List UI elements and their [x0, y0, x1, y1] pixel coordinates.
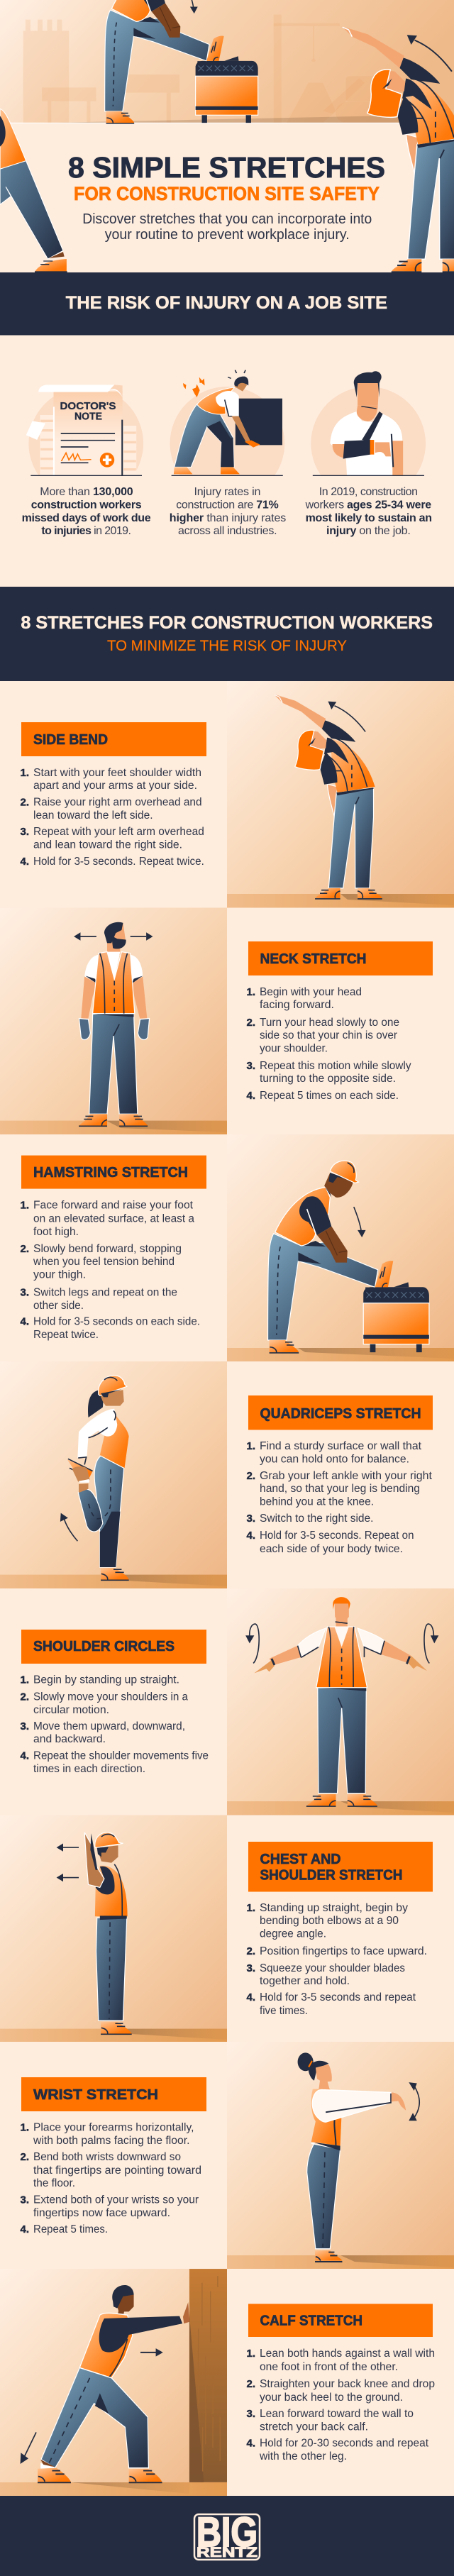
steps: wrist stretch: with both palms facing the floor. — [33, 2135, 190, 2147]
steps: calf stretch: 3. — [246, 2408, 255, 2420]
steps: quadriceps stretch: Find a sturdy surface or wall that — [260, 1440, 422, 1452]
illustration: calf stretch figure pushing a wall — [21, 2269, 227, 2482]
steps: shoulder circles: Repeat the shoulder movements five — [33, 1750, 209, 1762]
steps: wrist stretch: Repeat 5 times. — [33, 2223, 108, 2235]
steps: side bend: 3. — [20, 826, 29, 838]
steps: shoulder circles: 2. — [20, 1691, 29, 1703]
steps: calf stretch: 4. — [246, 2438, 255, 2450]
steps: shoulder circles — [20, 1674, 209, 1775]
panel: neck stretch — [0, 908, 433, 1134]
stat: injury rate: Injury rates in — [194, 486, 260, 498]
stat: injury rate — [170, 486, 286, 537]
steps: shoulder circles: Slowly move your shoulders in a — [33, 1691, 188, 1703]
icon: doctor's note: NOTE — [74, 411, 102, 423]
steps: chest and shoulder stretch: bending both elbows at a 90 — [260, 1915, 399, 1927]
steps: calf stretch — [246, 2348, 435, 2462]
label: side bend — [21, 722, 206, 756]
steps: chest and shoulder stretch: 3. — [246, 1962, 255, 1974]
steps: quadriceps stretch: 4. — [246, 1530, 255, 1542]
steps: chest and shoulder stretch: 1. — [246, 1902, 255, 1914]
label: quadriceps stretch — [248, 1395, 433, 1430]
illustration panel background and floor — [0, 2269, 227, 2496]
steps: chest and shoulder stretch: Hold for 3-5 seconds and repeat — [260, 1991, 416, 2003]
label: chest and shoulder stretch: SHOULDER STRETCH — [260, 1867, 403, 1883]
section banner: risk of injury — [0, 272, 454, 335]
panel: hero header — [0, 0, 454, 272]
section banner: risk of injury: THE RISK OF INJURY ON A JOB SITE — [66, 293, 387, 313]
logo: BigRentz: BIG — [196, 2509, 258, 2555]
steps: calf stretch: Lean both hands against a wall with — [260, 2348, 435, 2360]
steps: neck stretch: your shoulder. — [260, 1043, 328, 1054]
intro text — [82, 211, 372, 243]
steps: shoulder circles: 4. — [20, 1750, 29, 1762]
steps: hamstring stretch: 2. — [20, 1243, 29, 1255]
label: neck stretch — [248, 941, 433, 975]
title: 8 SIMPLE STRETCHES — [68, 151, 385, 184]
steps: shoulder circles: Begin by standing up straight. — [33, 1674, 179, 1686]
illustration panel background and floor — [0, 1361, 227, 1588]
label: chest and shoulder stretch: CHEST AND — [260, 1851, 340, 1867]
steps: chest and shoulder stretch: 2. — [246, 1945, 255, 1957]
steps: wrist stretch: Extend both of your wrists so your — [33, 2194, 199, 2206]
stat: age group: In 2019, construction — [319, 486, 418, 498]
steps: quadriceps stretch: behind you at the knee. — [260, 1496, 374, 1508]
steps: neck stretch: turning to the opposite side. — [260, 1073, 396, 1085]
steps: wrist stretch: the floor. — [33, 2177, 75, 2189]
panel: chest and shoulder stretch — [0, 1815, 433, 2042]
steps: shoulder circles: and backward. — [33, 1733, 106, 1745]
section banner: 8 stretches — [0, 587, 454, 681]
stat: age group — [305, 486, 432, 537]
steps: hamstring stretch: other side. — [33, 1300, 84, 1312]
steps: hamstring stretch: Slowly bend forward, stopping — [33, 1243, 182, 1255]
steps: quadriceps stretch — [246, 1440, 433, 1555]
logo: BigRentz: RENTZ — [196, 2545, 258, 2560]
label: neck stretch: NECK STRETCH — [260, 951, 366, 967]
steps: side bend — [20, 767, 204, 868]
intro text: your routine to prevent workplace injury. — [105, 227, 350, 243]
icon: doctor's note — [26, 385, 143, 476]
illustration: neck stretch figure — [74, 922, 153, 1126]
steps: neck stretch: 3. — [246, 1060, 255, 1072]
steps: wrist stretch — [20, 2122, 201, 2235]
steps: side bend: 4. — [20, 856, 29, 868]
steps: side bend: Start with your feet shoulder width — [33, 767, 201, 779]
steps: side bend: and lean toward the right side. — [33, 839, 182, 851]
steps: hamstring stretch: Repeat twice. — [33, 1329, 99, 1341]
stat: injury rate: across all industries. — [178, 525, 277, 537]
steps: shoulder circles: Move them upward, downward, — [33, 1720, 185, 1732]
panel: side bend — [20, 681, 454, 908]
steps: calf stretch: Straighten your back knee and drop — [260, 2378, 435, 2390]
steps: quadriceps stretch: hand, so that your leg is bending — [260, 1483, 420, 1495]
section banner: 8 stretches: TO MINIMIZE THE RISK OF INJURY — [107, 638, 347, 654]
steps: quadriceps stretch: Switch to the right side. — [260, 1513, 373, 1525]
label: quadriceps stretch: QUADRICEPS STRETCH — [260, 1405, 421, 1422]
steps: hamstring stretch: your thigh. — [33, 1269, 86, 1281]
steps: hamstring stretch: on an elevated surface, at least a — [33, 1212, 194, 1225]
panel: wrist stretch — [20, 2042, 454, 2269]
icon: worker lifting a heavy box with back pain — [170, 370, 285, 476]
panel: calf stretch — [0, 2269, 435, 2496]
steps: chest and shoulder stretch: Standing up straight, begin by — [260, 1902, 408, 1914]
steps: calf stretch: stretch your back calf. — [260, 2421, 368, 2433]
steps: calf stretch: with the other leg. — [259, 2450, 347, 2462]
steps: chest and shoulder stretch: together and hold. — [260, 1975, 350, 1987]
steps: wrist stretch: 1. — [20, 2122, 29, 2134]
steps: wrist stretch: Place your forearms horizontally, — [33, 2122, 194, 2134]
stat: age group: most likely to sustain an — [306, 512, 432, 524]
steps: hamstring stretch: 1. — [20, 1200, 29, 1212]
section banner: 8 stretches: 8 STRETCHES FOR CONSTRUCTION WORKERS — [21, 613, 433, 633]
steps: side bend: Hold for 3-5 seconds. Repeat twice. — [33, 856, 204, 868]
steps: neck stretch: Turn your head slowly to one — [260, 1017, 399, 1029]
steps: shoulder circles: 3. — [20, 1720, 29, 1732]
steps: neck stretch: facing forward. — [260, 999, 334, 1011]
illustration panel background and floor — [0, 1815, 227, 2042]
steps: quadriceps stretch: each side of your body twice. — [260, 1543, 403, 1555]
panel: hamstring stretch — [20, 1134, 454, 1361]
label: side bend: SIDE BEND — [33, 731, 108, 748]
stat: missed days of work — [22, 486, 151, 537]
steps: quadriceps stretch: you can hold onto for balance. — [260, 1454, 409, 1466]
footer — [0, 2496, 454, 2576]
steps: neck stretch: 2. — [246, 1017, 255, 1029]
label: calf stretch: CALF STRETCH — [260, 2313, 362, 2329]
illustration panel background and floor — [227, 681, 454, 908]
illustration: hamstring stretch figure with stool — [268, 1161, 429, 1353]
illustration: chest and shoulder stretch figure — [57, 1833, 132, 2034]
illustration: side bend figure — [274, 694, 382, 899]
label: hamstring stretch — [21, 1156, 206, 1189]
stat: missed days of work: to injuries in 2019. — [41, 525, 131, 537]
icon: injured worker with arm in a sling — [311, 371, 426, 476]
steps: shoulder circles: times in each direction. — [33, 1763, 145, 1775]
steps: hamstring stretch: foot high. — [33, 1226, 79, 1238]
illustration: shoulder circles figure — [245, 1597, 438, 1806]
steps: chest and shoulder stretch: Squeeze your shoulder blades — [260, 1962, 405, 1974]
steps: neck stretch: side so that your chin is over — [260, 1029, 397, 1041]
label: calf stretch — [248, 2304, 433, 2337]
steps: side bend: Repeat with your left arm overhead — [33, 826, 204, 838]
illustration panel background and floor — [227, 2042, 454, 2269]
panel: quadriceps stretch — [0, 1361, 433, 1588]
label: hamstring stretch: HAMSTRING STRETCH — [33, 1164, 188, 1181]
steps: calf stretch: Lean forward toward the wall to — [260, 2408, 414, 2420]
steps: hamstring stretch: Switch legs and repeat on the — [33, 1287, 177, 1298]
illustration: quadriceps stretch figure — [60, 1376, 129, 1580]
subtitle: FOR CONSTRUCTION SITE SAFETY — [74, 183, 380, 204]
steps: wrist stretch: 2. — [20, 2151, 29, 2163]
steps: hamstring stretch: 4. — [20, 1316, 29, 1328]
steps: calf stretch: Hold for 20-30 seconds and repeat — [260, 2438, 429, 2450]
label: shoulder circles: SHOULDER CIRCLES — [33, 1638, 175, 1654]
stat: age group: workers ages 25-34 were — [305, 499, 431, 512]
steps: hamstring stretch: 3. — [20, 1287, 29, 1298]
hero construction site backdrop — [0, 0, 454, 123]
illustration: wrist stretch figure — [298, 2052, 419, 2262]
steps: wrist stretch: 3. — [20, 2194, 29, 2206]
panel: shoulder circles — [20, 1588, 454, 1815]
steps: side bend: 2. — [20, 796, 29, 809]
steps: quadriceps stretch: 2. — [246, 1470, 255, 1482]
steps: wrist stretch: fingertips now face upward. — [33, 2207, 170, 2219]
steps: chest and shoulder stretch — [246, 1902, 427, 2017]
panel: injury statistics — [22, 370, 432, 537]
illustration panel background and floor — [227, 1588, 454, 1815]
intro text: Discover stretches that you can incorporate into — [82, 211, 372, 227]
label: chest and shoulder stretch — [248, 1842, 433, 1891]
steps: hamstring stretch: Hold for 3-5 seconds on each side. — [33, 1316, 200, 1328]
stat: missed days of work: construction workers — [31, 499, 142, 512]
steps: calf stretch: one foot in front of the other. — [260, 2361, 398, 2373]
steps: chest and shoulder stretch: five times. — [260, 2005, 308, 2017]
steps: wrist stretch: that fingertips are pointing toward — [33, 2165, 201, 2177]
illustration panel background and floor — [0, 908, 227, 1134]
steps: calf stretch: 2. — [246, 2378, 255, 2390]
label: shoulder circles — [21, 1630, 206, 1664]
steps: neck stretch: Begin with your head — [260, 986, 362, 998]
steps: shoulder circles: 1. — [20, 1674, 29, 1686]
steps: hamstring stretch: Face forward and raise your foot — [33, 1200, 194, 1212]
steps: neck stretch — [246, 986, 411, 1102]
steps: neck stretch: Repeat this motion while slowly — [260, 1060, 411, 1072]
stat: age group: injury on the job. — [326, 525, 411, 537]
illustration: worker leaning, cropped at left — [0, 109, 67, 272]
steps: side bend: lean toward the left side. — [33, 809, 153, 822]
steps: neck stretch: 1. — [246, 986, 255, 998]
steps: neck stretch: 4. — [246, 1090, 255, 1102]
steps: wrist stretch: 4. — [20, 2223, 29, 2235]
stat: missed days of work: More than 130,000 — [40, 486, 133, 498]
steps: quadriceps stretch: Hold for 3-5 seconds. Repeat on — [260, 1530, 414, 1542]
stat: injury rate: construction are 71% — [176, 499, 279, 512]
steps: hamstring stretch: when you feel tension behind — [33, 1256, 175, 1268]
steps: quadriceps stretch: 1. — [246, 1440, 255, 1452]
steps: side bend: 1. — [20, 767, 29, 779]
illustration: worker side bending, cropped at right — [342, 26, 454, 272]
label: wrist stretch: WRIST STRETCH — [33, 2086, 158, 2103]
label: wrist stretch — [21, 2077, 206, 2111]
steps: calf stretch: your back heel to the ground. — [260, 2392, 403, 2404]
illustration: worker stretching hamstring on a stool, cropped at top — [105, 0, 258, 123]
steps: hamstring stretch — [20, 1200, 200, 1341]
steps: quadriceps stretch: Grab your left ankle with your right — [260, 1470, 433, 1482]
steps: chest and shoulder stretch: degree angle. — [260, 1928, 326, 1940]
steps: chest and shoulder stretch: Position fingertips to face upward. — [260, 1945, 427, 1957]
steps: quadriceps stretch: 3. — [246, 1513, 255, 1525]
steps: chest and shoulder stretch: 4. — [246, 1991, 255, 2003]
steps: neck stretch: Repeat 5 times on each side. — [260, 1090, 399, 1102]
steps: side bend: Raise your right arm overhead and — [33, 796, 202, 809]
steps: calf stretch: 1. — [246, 2348, 255, 2360]
steps: shoulder circles: circular motion. — [33, 1704, 109, 1716]
stat: injury rate: higher than injury rates — [170, 512, 286, 524]
illustration panel background and floor — [227, 1134, 454, 1361]
steps: side bend: apart and your arms at your side. — [33, 780, 197, 792]
stat: missed days of work: missed days of work due — [22, 512, 151, 524]
steps: wrist stretch: Bend both wrists downward so — [33, 2151, 181, 2163]
icon: doctor's note: DOCTOR'S — [60, 401, 116, 412]
